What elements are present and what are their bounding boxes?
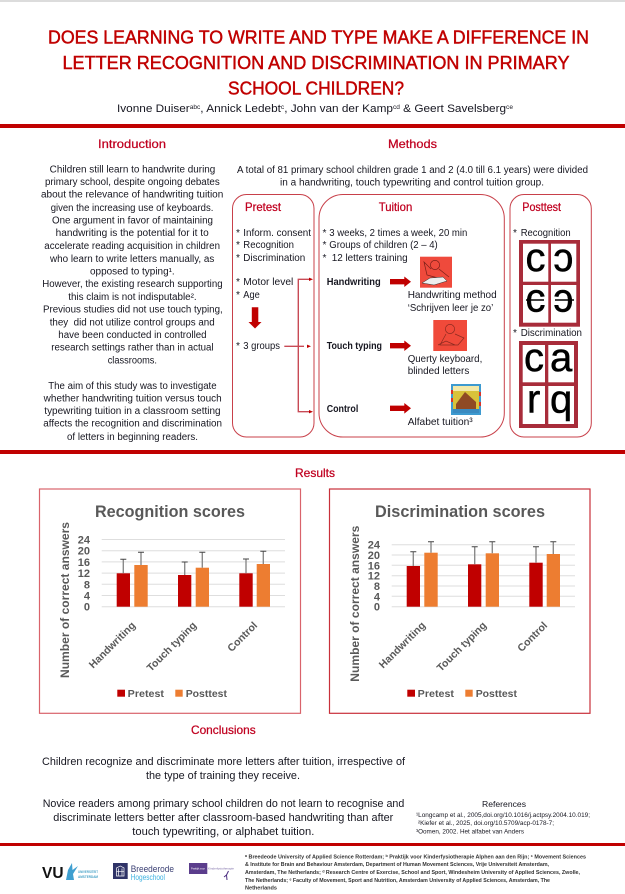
- text block: introduction: they did not utilize control groups and: [50, 317, 215, 328]
- discrimination label: *: [513, 328, 517, 339]
- bars: touch typing: [178, 552, 209, 607]
- icon: alphabet book: [451, 384, 481, 415]
- logo: VU University Amsterdam: UNIVERSITEIT: [78, 870, 98, 874]
- bars: touch typing: [468, 542, 499, 607]
- legend: [117, 688, 227, 700]
- pretest list: *: [236, 290, 240, 301]
- logo: Praktijk: [189, 863, 234, 880]
- tuition list: *: [322, 253, 326, 264]
- bars: handwriting: [407, 542, 438, 607]
- text block: conclusions: the type of training they receive.: [146, 770, 300, 782]
- chart: recognition scores: [40, 489, 300, 713]
- recognition letter grid: c: [554, 276, 574, 320]
- pretest list: Discrimination: [243, 253, 305, 264]
- recognition letter grid: c: [526, 236, 546, 280]
- gridlines and axis labels: 0: [374, 602, 380, 614]
- text block: conclusions: Novice readers among primary school children do not learn to recognise and: [43, 798, 404, 810]
- gridlines and axis labels: 20: [368, 550, 380, 562]
- pretest list: *: [236, 228, 240, 239]
- pretest list: [236, 228, 311, 301]
- text block: methods summary: [237, 165, 588, 188]
- arrows: group allocation: [284, 278, 313, 413]
- text block: introduction: this claim is not indisputable².: [68, 292, 197, 303]
- logo: Breederode Hogeschool: Breederode: [131, 864, 174, 875]
- gridlines and axis labels: 12: [368, 571, 380, 583]
- text block: introduction: handwriting is the potential for it to: [56, 228, 209, 239]
- authors: Ivonne Duiser: [117, 103, 184, 115]
- gridlines and axis labels: 16: [78, 557, 90, 569]
- caption: querty keyboard: Querty keyboard,: [408, 354, 482, 365]
- text block: introduction: given the increasing use of keyboards.: [51, 203, 213, 214]
- recognition label: *: [513, 228, 517, 239]
- discrimination label: Discrimination: [521, 328, 582, 339]
- bars: handwriting: [117, 552, 148, 607]
- panel: posttest: [510, 194, 591, 437]
- logo: VU University Amsterdam: [42, 863, 98, 882]
- text block: introduction: [41, 164, 223, 443]
- pretest list: Age: [243, 290, 260, 301]
- label: handwriting: Handwriting: [327, 277, 381, 288]
- text block: introduction: accelerate reading acquisition in children: [44, 241, 220, 252]
- text block: introduction: The aim of this study was to investigate: [48, 381, 217, 392]
- category labels: Handwriting: [377, 620, 428, 671]
- text block: introduction: typewriting tuition in a classroom setting: [44, 406, 221, 417]
- text block: introduction: However, the existing research supporting: [42, 279, 223, 290]
- gridlines and axis labels: 8: [374, 581, 380, 593]
- title: DOES LEARNING TO WRITE AND TYPE MAKE A DIFFERENCE IN: [48, 28, 589, 48]
- icon: child handwriting: [420, 257, 452, 288]
- pretest list: *: [236, 253, 240, 264]
- references: ²Kiefer et al., 2025, doi.org/10.5709/acp-0178-7;: [418, 820, 554, 827]
- arrow: touch typing: [390, 340, 411, 351]
- affiliations: [245, 854, 586, 892]
- authors: , Annick Ledebt: [200, 103, 281, 115]
- caption: querty keyboard: blinded letters: [408, 366, 469, 377]
- logo: Praktijk: Praktijk voor: [191, 866, 205, 870]
- gridlines and axis labels: 16: [368, 560, 380, 572]
- pretest list: Recognition: [243, 240, 294, 251]
- title: SCHOOL CHILDREN?: [228, 78, 404, 98]
- bars: control: [529, 542, 560, 607]
- pretest list: *: [236, 240, 240, 251]
- gridlines and axis labels: 12: [78, 568, 90, 580]
- references: ¹Longcamp et al., 2005,doi.org/10.1016/j.actpsy.2004.10.019;: [416, 812, 590, 819]
- arrow: control: [390, 403, 411, 414]
- caption: handwriting method: Handwriting method: [408, 290, 497, 301]
- category labels: Touch typing: [145, 620, 199, 674]
- pretest list: Inform. consent: [243, 228, 311, 239]
- text block: introduction: opposed to typing¹.: [90, 266, 175, 277]
- text block: introduction: Previous studies did not use touch typing,: [43, 305, 223, 316]
- logo: Breederode Hogeschool: Hogeschool: [131, 872, 165, 882]
- text block: conclusions: Children recognize and discriminate more letters after tuition, irrespective of: [42, 756, 406, 768]
- tuition heading: Tuition: [379, 200, 412, 214]
- references: References: [482, 799, 526, 809]
- gridlines and axis labels: 8: [84, 579, 90, 591]
- gridlines and axis labels: 24: [368, 540, 381, 552]
- tuition list: [322, 228, 467, 264]
- affiliations: Netherlands: [245, 886, 277, 892]
- authors: abc: [190, 105, 200, 111]
- caption: querty keyboard: [408, 354, 482, 377]
- discrimination letter grid: a: [550, 336, 573, 380]
- affiliations: ᵃ Breedeode University of Applied Science Rotterdam; ᵇ Praktijk voor Kinderfysiotherapie Alphen aan den Rijn; ᶜ Movement Sciences: [245, 854, 586, 860]
- chart: discrimination scores: [330, 489, 590, 713]
- pretest list: *: [236, 277, 240, 288]
- logo: Breederode Hogeschool: [113, 863, 174, 882]
- logo: Praktijk: Kinderfysiotherapie: [208, 866, 234, 870]
- text block: methods summary: in a handwriting, touch typewriting and control tuition group.: [280, 178, 544, 188]
- text block: introduction: One argument in favor of maintaining: [52, 215, 213, 226]
- text block: introduction: have been conducted in controlled: [58, 330, 207, 341]
- category labels: Handwriting: [87, 620, 138, 671]
- arrow: handwriting: [390, 276, 411, 287]
- gridlines and axis labels: 0: [84, 602, 90, 614]
- heading: introduction: Introduction: [98, 137, 166, 151]
- gridlines and axis labels: [78, 534, 285, 614]
- text block: introduction: whether handwriting tuition versus touch: [43, 394, 222, 405]
- text block: introduction: who learn to write letters manually, as: [49, 254, 214, 265]
- label: 3 groups: 3 groups: [243, 341, 280, 352]
- y axis title: Number of correct answers: [350, 526, 362, 682]
- bars: control: [239, 551, 270, 607]
- legend: Posttest: [476, 688, 517, 700]
- gridlines and axis labels: [368, 540, 575, 614]
- category labels: Control: [225, 620, 260, 655]
- recognition letter grid: c: [526, 276, 546, 320]
- label: 3 groups: *: [236, 341, 240, 352]
- affiliations: Amsterdam, The Netherlands; ᵈ Research Centre of Exercise, School and Sport, Windesheim University of Applied Sciences, Zwolle,: [245, 869, 580, 876]
- pretest heading: Pretest: [245, 200, 282, 214]
- arrow: down to groups: [248, 307, 262, 328]
- discrimination letter grid: q: [550, 378, 572, 422]
- text block: introduction: primary school, despite ongoing debates: [45, 177, 220, 188]
- caption: handwriting method: ‘Schrijven leer je zo’: [408, 303, 493, 314]
- heading: methods: Methods: [388, 137, 437, 151]
- legend: Pretest: [128, 688, 165, 700]
- logo: VU University Amsterdam: AMSTERDAM: [78, 875, 98, 879]
- gridlines and axis labels: 4: [84, 590, 91, 602]
- category labels: Control: [515, 620, 550, 655]
- discrimination letter grid: r: [527, 378, 540, 422]
- label: touch typing: Touch typing: [327, 341, 382, 352]
- authors: , John van der Kamp: [284, 103, 393, 115]
- gridlines and axis labels: 20: [78, 546, 90, 558]
- text block: introduction: of letters in beginning readers.: [67, 432, 198, 443]
- text block: conclusions: discriminate letters better after classroom-based handwriting than after: [53, 812, 394, 824]
- text block: introduction: affects the recognition and discrimination: [43, 419, 222, 430]
- authors: c: [281, 105, 284, 111]
- affiliations: & Institute for Brain and Behaviour Amsterdam, Department of Human Movement Sciences, Vrije Universiteit Amsterdam,: [245, 862, 549, 868]
- legend: [407, 688, 517, 700]
- caption: alfabet tuition: Alfabet tuition³: [408, 417, 473, 428]
- text block: introduction: about the relevance of handwriting tuition: [41, 190, 223, 200]
- posttest heading: Posttest: [522, 200, 562, 214]
- icon: child typing: [433, 320, 467, 351]
- tuition list: 3 weeks, 2 times a week, 20 min: [329, 228, 467, 239]
- category labels: [377, 620, 550, 674]
- references: ³Oomen, 2002. Het alfabet van Anders: [416, 828, 524, 836]
- text block: introduction: Children still learn to handwrite during: [50, 164, 215, 176]
- category labels: Touch typing: [435, 620, 489, 674]
- chart title: Recognition scores: [95, 503, 245, 521]
- logo: VU University Amsterdam: VU: [42, 865, 64, 882]
- legend: Pretest: [418, 688, 455, 700]
- gridlines and axis labels: 4: [374, 591, 381, 603]
- text block: conclusions: [42, 756, 406, 838]
- title: [48, 28, 589, 98]
- authors: ce: [506, 105, 514, 111]
- recognition label: Recognition: [521, 228, 571, 239]
- heading: conclusions: Conclusions: [191, 723, 256, 737]
- recognition letter grid: [519, 236, 580, 327]
- panel: tuition: [319, 194, 504, 437]
- references: [416, 799, 590, 836]
- recognition letter grid: c: [554, 236, 574, 280]
- title: LETTER RECOGNITION AND DISCRIMINATION IN PRIMARY: [62, 53, 570, 73]
- gridlines and axis labels: 24: [78, 534, 91, 546]
- pretest list: Motor level: [243, 277, 293, 288]
- authors: cd: [393, 105, 400, 111]
- discrimination letter grid: [519, 336, 578, 428]
- panel: pretest: [232, 194, 314, 437]
- label: control: Control: [327, 404, 358, 415]
- y axis title: Number of correct answers: [60, 522, 72, 678]
- text block: introduction: research settings rather than in actual: [51, 343, 214, 354]
- text block: conclusions: touch typewriting, or alphabet tuition.: [132, 826, 314, 838]
- text block: methods summary: A total of 81 primary school children grade 1 and 2 (4.0 till 6.1 years) were divided: [237, 165, 588, 176]
- caption: handwriting method: [408, 290, 497, 314]
- legend: Posttest: [186, 688, 227, 700]
- category labels: [87, 620, 260, 674]
- tuition list: Groups of children (2 – 4): [329, 240, 438, 251]
- discrimination letter grid: c: [524, 336, 544, 380]
- text block: introduction: classrooms.: [108, 355, 157, 366]
- tuition list: *: [322, 240, 326, 251]
- tuition list: *: [322, 228, 326, 239]
- chart title: Discrimination scores: [375, 503, 545, 521]
- affiliations: The Netherlands; ᵉ Faculty of Movement, Sport and Nutrition, Amsterdam University of Applied Sciences, Amsterdam, The: [245, 878, 550, 884]
- heading: results: Results: [295, 466, 335, 480]
- tuition list: 12 letters training: [332, 253, 408, 264]
- authors: & Geert Savelsberg: [400, 103, 506, 115]
